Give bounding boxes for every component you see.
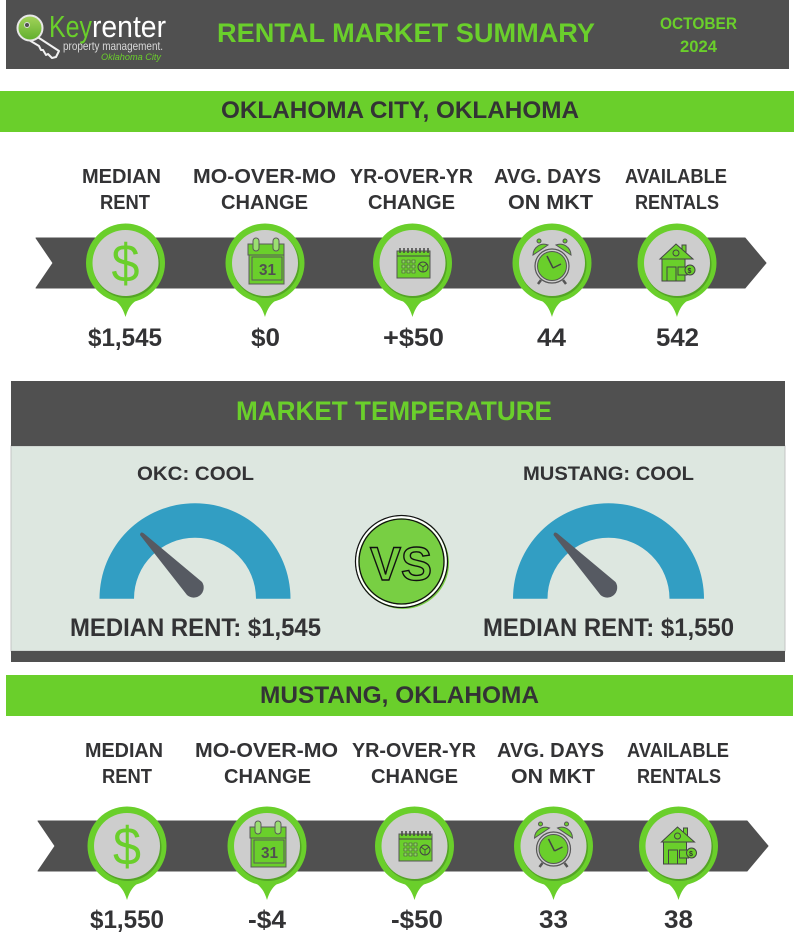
icon: house pin: $ bbox=[689, 851, 693, 858]
icon: median rent dollar pin bbox=[88, 806, 166, 900]
metric values: Mustang: 33 bbox=[539, 906, 568, 934]
icon: month calendar pin bbox=[226, 224, 304, 317]
metric labels: Oklahoma City: RENT bbox=[100, 192, 150, 214]
metric values: Oklahoma City: 44 bbox=[537, 324, 566, 352]
gauge: Mustang bbox=[513, 503, 704, 599]
badge: VS: VS bbox=[370, 537, 432, 590]
date: 2024 bbox=[680, 38, 718, 56]
metric values: Mustang: -$4 bbox=[248, 906, 286, 934]
icon: median rent dollar pin: $ bbox=[112, 234, 140, 294]
label: Mustang cool: MUSTANG: COOL bbox=[523, 463, 694, 485]
icon: alarm clock pin bbox=[514, 806, 593, 900]
metric labels: Oklahoma City: ON MKT bbox=[508, 192, 593, 214]
logo: Keyrenter property management Oklahoma City: Key bbox=[49, 9, 92, 44]
ribbon arrow: Oklahoma City bbox=[36, 238, 766, 288]
metric labels: Mustang: AVG. DAYS bbox=[497, 740, 604, 762]
metric values: Oklahoma City: $1,545 bbox=[88, 324, 162, 352]
metric values: Mustang: $1,550 bbox=[90, 906, 164, 934]
logo: Keyrenter property management Oklahoma City: Oklahoma City bbox=[101, 52, 161, 62]
metric labels: Mustang: MEDIAN bbox=[85, 740, 163, 762]
icon: median rent dollar pin: $ bbox=[113, 817, 141, 877]
metric labels: Oklahoma City: AVAILABLE bbox=[625, 166, 727, 188]
metric values: Oklahoma City: 542 bbox=[656, 324, 699, 352]
metric values: Oklahoma City: +$50 bbox=[383, 324, 444, 352]
icon: house pin: $ bbox=[688, 268, 692, 275]
icon: house pin bbox=[638, 224, 716, 317]
metric labels: Oklahoma City: MO-OVER-MO bbox=[193, 166, 336, 188]
metric labels: Mustang: ON MKT bbox=[511, 766, 595, 788]
metric labels: Mustang bbox=[85, 740, 729, 788]
heading: market temperature: MARKET TEMPERATURE bbox=[236, 396, 552, 426]
date: OCTOBER bbox=[660, 15, 737, 33]
section heading: Mustang bbox=[6, 675, 793, 716]
icon: month calendar pin: 31 bbox=[259, 262, 276, 279]
heading: market temperature bbox=[11, 381, 785, 446]
metric labels: Mustang: YR-OVER-YR bbox=[352, 740, 477, 762]
metric values: Mustang bbox=[90, 906, 693, 934]
icon: month calendar pin bbox=[228, 806, 306, 900]
header bar bbox=[6, 0, 789, 69]
metric labels: Mustang: MO-OVER-MO bbox=[195, 740, 338, 762]
logo: Keyrenter property management Oklahoma City: renter bbox=[92, 9, 166, 44]
metric labels: Oklahoma City: MEDIAN bbox=[82, 166, 161, 188]
metric labels: Oklahoma City: AVG. DAYS bbox=[494, 166, 601, 188]
icon: year calendar pin bbox=[373, 224, 452, 317]
text: Mustang median rent: MEDIAN RENT: $1,550 bbox=[483, 614, 734, 642]
metric values: Mustang: 38 bbox=[664, 906, 693, 934]
metric values: Oklahoma City: $0 bbox=[251, 324, 280, 352]
metric labels: Mustang: RENT bbox=[102, 766, 152, 788]
metric labels: Oklahoma City: CHANGE bbox=[221, 192, 308, 214]
section heading: Oklahoma City: OKLAHOMA CITY, OKLAHOMA bbox=[221, 97, 579, 124]
label: OKC cool: OKC: COOL bbox=[137, 463, 254, 485]
text: OKC median rent: MEDIAN RENT: $1,545 bbox=[70, 614, 321, 642]
icon: median rent dollar pin bbox=[86, 224, 165, 317]
metric labels: Mustang: RENTALS bbox=[637, 766, 721, 788]
icon: year calendar pin bbox=[375, 806, 454, 900]
metric labels: Oklahoma City: RENTALS bbox=[635, 192, 719, 214]
icon: house pin bbox=[639, 806, 718, 900]
icon: month calendar pin: 31 bbox=[261, 845, 278, 862]
metric labels: Mustang: CHANGE bbox=[224, 766, 311, 788]
section heading: Oklahoma City bbox=[0, 91, 794, 132]
metric labels: Oklahoma City bbox=[82, 166, 727, 214]
ribbon arrow: Mustang bbox=[38, 821, 768, 871]
metric labels: Oklahoma City: YR-OVER-YR bbox=[350, 166, 474, 188]
icon: alarm clock pin bbox=[512, 224, 592, 317]
panel: market temperature bbox=[11, 381, 785, 662]
gauge: OKC bbox=[100, 503, 290, 599]
section heading: Mustang: MUSTANG, OKLAHOMA bbox=[260, 682, 539, 709]
metric labels: Oklahoma City: CHANGE bbox=[368, 192, 455, 214]
metric values: Mustang: -$50 bbox=[391, 906, 443, 934]
title: RENTAL MARKET SUMMARY bbox=[217, 18, 595, 48]
logo: Keyrenter property management Oklahoma City bbox=[18, 9, 166, 62]
logo: Keyrenter property management Oklahoma City: property management. bbox=[63, 39, 163, 53]
metric labels: Mustang: CHANGE bbox=[371, 766, 458, 788]
metric values: Oklahoma City bbox=[88, 324, 699, 352]
metric labels: Mustang: AVAILABLE bbox=[627, 740, 729, 762]
date bbox=[660, 15, 737, 56]
badge: VS bbox=[356, 516, 449, 609]
